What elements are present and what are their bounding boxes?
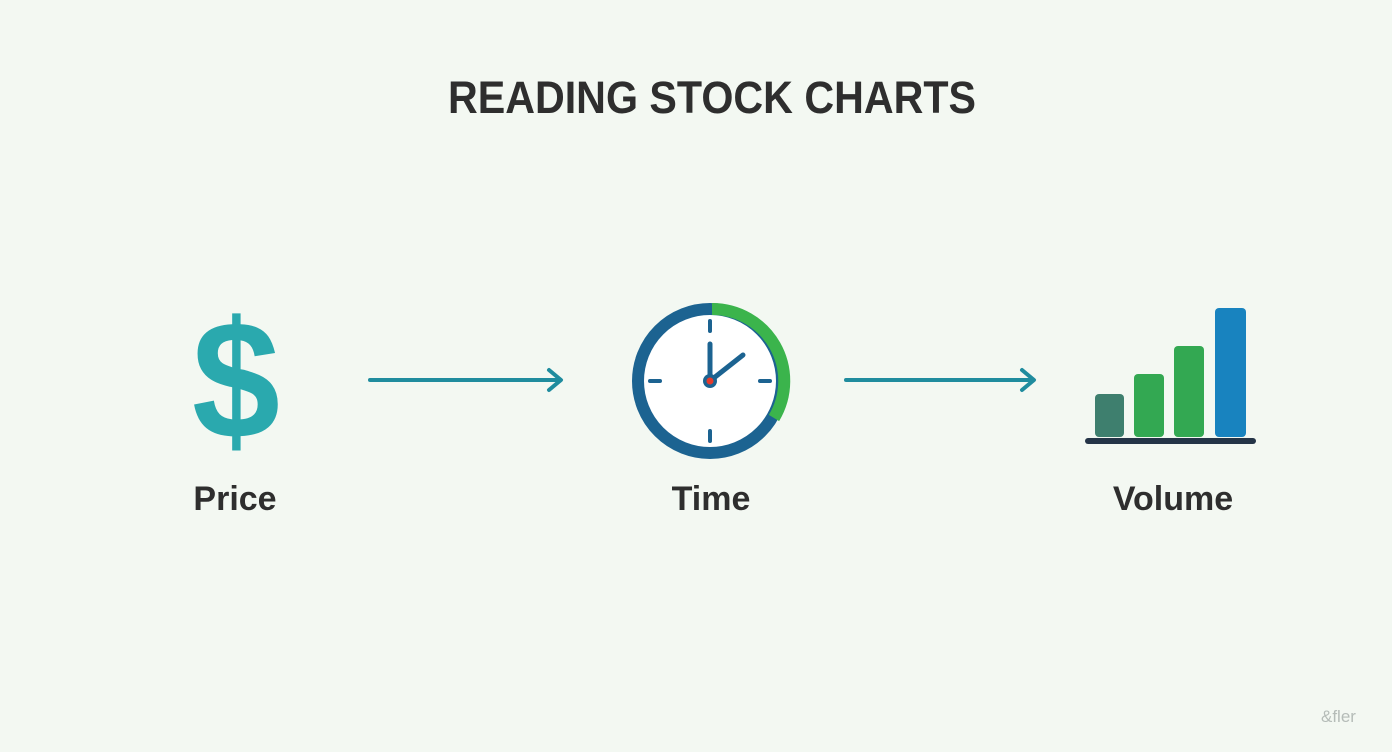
arrow: price to time [370,370,561,390]
arrow: time to volume [846,370,1034,390]
title: READING STOCK CHARTS [448,72,976,123]
icon: bar chart (volume) [1085,308,1256,444]
icon: clock (time) [638,309,784,453]
icon: dollar sign (price): $ [192,286,280,474]
label: time: Time [672,480,750,518]
watermark: &fler [1321,707,1356,726]
label: volume: Volume [1113,480,1233,518]
label: price: Price [193,480,277,518]
